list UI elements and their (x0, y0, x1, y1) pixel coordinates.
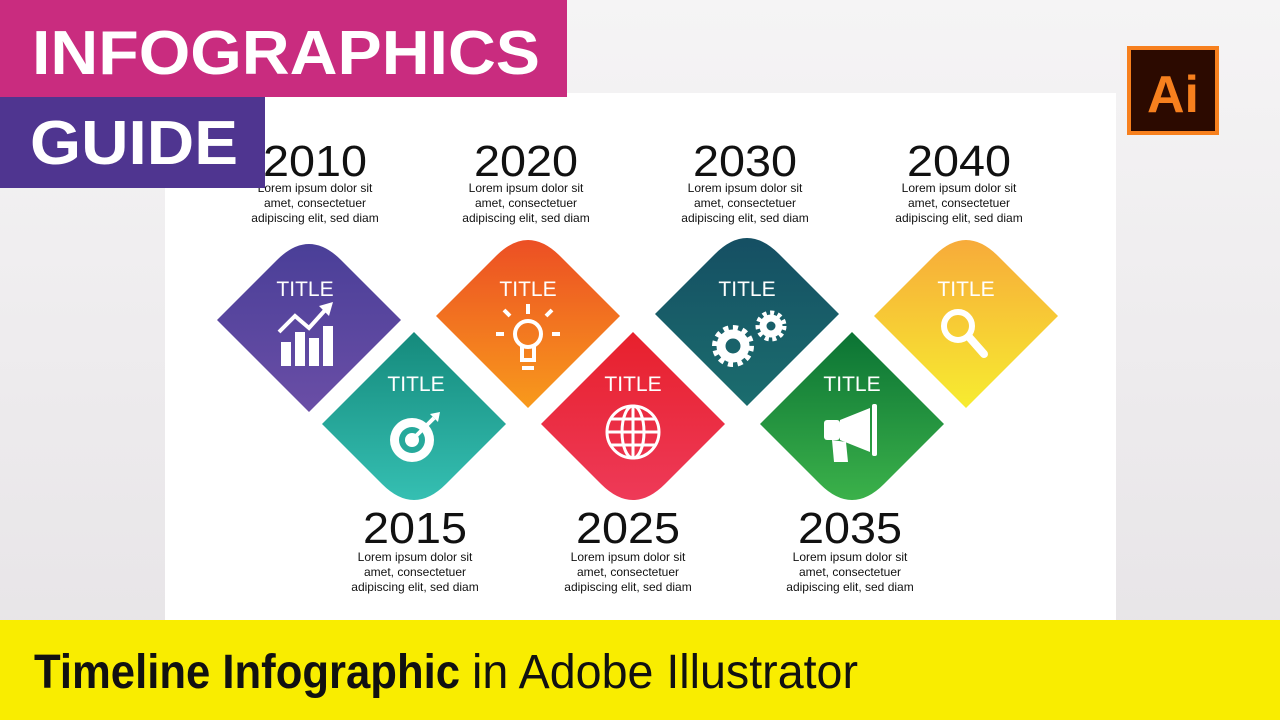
text block: 2035: adipiscing elit, sed diam (786, 580, 914, 594)
text block: 2040: 2040 (907, 137, 1011, 186)
bottom bar: subtitle: Timeline Infographic (34, 646, 460, 699)
text block: 2025 (564, 504, 692, 594)
text block: 2025: adipiscing elit, sed diam (564, 580, 692, 594)
bottom bar: subtitle: in Adobe Illustrator (472, 646, 858, 699)
text block: 2035: 2035 (798, 504, 902, 553)
icon: chart (279, 302, 333, 366)
icon: Adobe Illustrator logo (1129, 48, 1217, 133)
shape: 2015 teal (322, 332, 506, 500)
text block: 2020: 2020 (474, 137, 578, 186)
text block: 2020: amet, consectetuer (475, 196, 577, 210)
shape: 2025 red (541, 332, 725, 500)
shape: 2020 orange: TITLE (499, 278, 557, 301)
text block: 2025: Lorem ipsum dolor sit (571, 550, 686, 564)
icon: globe (607, 406, 659, 458)
text block: 2035: Lorem ipsum dolor sit (793, 550, 908, 564)
banner: GUIDE: GUIDE (30, 109, 238, 178)
text block: 2040: adipiscing elit, sed diam (895, 211, 1023, 225)
text block: 2030 (681, 137, 809, 225)
icon: magnifier (944, 312, 984, 354)
icon: light bulb (496, 304, 560, 368)
shape: 2020 orange (436, 240, 620, 408)
shape: 2010 purple (217, 244, 401, 412)
text block: 2015: Lorem ipsum dolor sit (358, 550, 473, 564)
shape: 2030 dark teal (655, 238, 839, 406)
icon: megaphone (824, 404, 877, 462)
icon: gears (715, 313, 784, 364)
text block: 2020 (462, 137, 590, 225)
white panel (165, 93, 1116, 620)
shape: 2040 yellow (874, 240, 1058, 408)
text block: 2040: amet, consectetuer (908, 196, 1010, 210)
banner: GUIDE (0, 97, 265, 188)
shape: 2010 purple: TITLE (276, 278, 334, 301)
text block: 2030: 2030 (693, 137, 797, 186)
text block: 2010 (251, 137, 379, 225)
text block: 2025: 2025 (576, 504, 680, 553)
shape: 2035 green: TITLE (823, 373, 881, 396)
banner: INFOGRAPHICS: INFOGRAPHICS (32, 19, 540, 88)
text block: 2035 (786, 504, 914, 594)
text block: 2030: amet, consectetuer (694, 196, 796, 210)
text block: 2020: adipiscing elit, sed diam (462, 211, 590, 225)
text block: 2035: amet, consectetuer (799, 565, 901, 579)
text block: 2010: 2010 (263, 137, 367, 186)
text block: 2040: Lorem ipsum dolor sit (902, 181, 1017, 195)
shape: 2025 red: TITLE (604, 373, 662, 396)
shape: 2040 yellow: TITLE (937, 278, 995, 301)
text block: 2010: Lorem ipsum dolor sit (258, 181, 373, 195)
shape: 2015 teal: TITLE (387, 373, 445, 396)
text block: 2025: amet, consectetuer (577, 565, 679, 579)
text block: 2010: amet, consectetuer (264, 196, 366, 210)
text block: 2030: Lorem ipsum dolor sit (688, 181, 803, 195)
text block: 2040 (895, 137, 1023, 225)
shape: 2035 green (760, 332, 944, 500)
icon: Adobe Illustrator logo: Ai (1147, 66, 1199, 124)
icon: target (390, 412, 440, 462)
text block: 2015: amet, consectetuer (364, 565, 466, 579)
text block: 2030: adipiscing elit, sed diam (681, 211, 809, 225)
bottom bar: subtitle (0, 620, 1280, 720)
text block: 2015: 2015 (363, 504, 467, 553)
text block: 2010: adipiscing elit, sed diam (251, 211, 379, 225)
text block: 2015: adipiscing elit, sed diam (351, 580, 479, 594)
banner: INFOGRAPHICS (0, 0, 567, 97)
text block: 2020: Lorem ipsum dolor sit (469, 181, 584, 195)
shape: 2030 dark teal: TITLE (718, 278, 776, 301)
text block: 2015 (351, 504, 479, 594)
